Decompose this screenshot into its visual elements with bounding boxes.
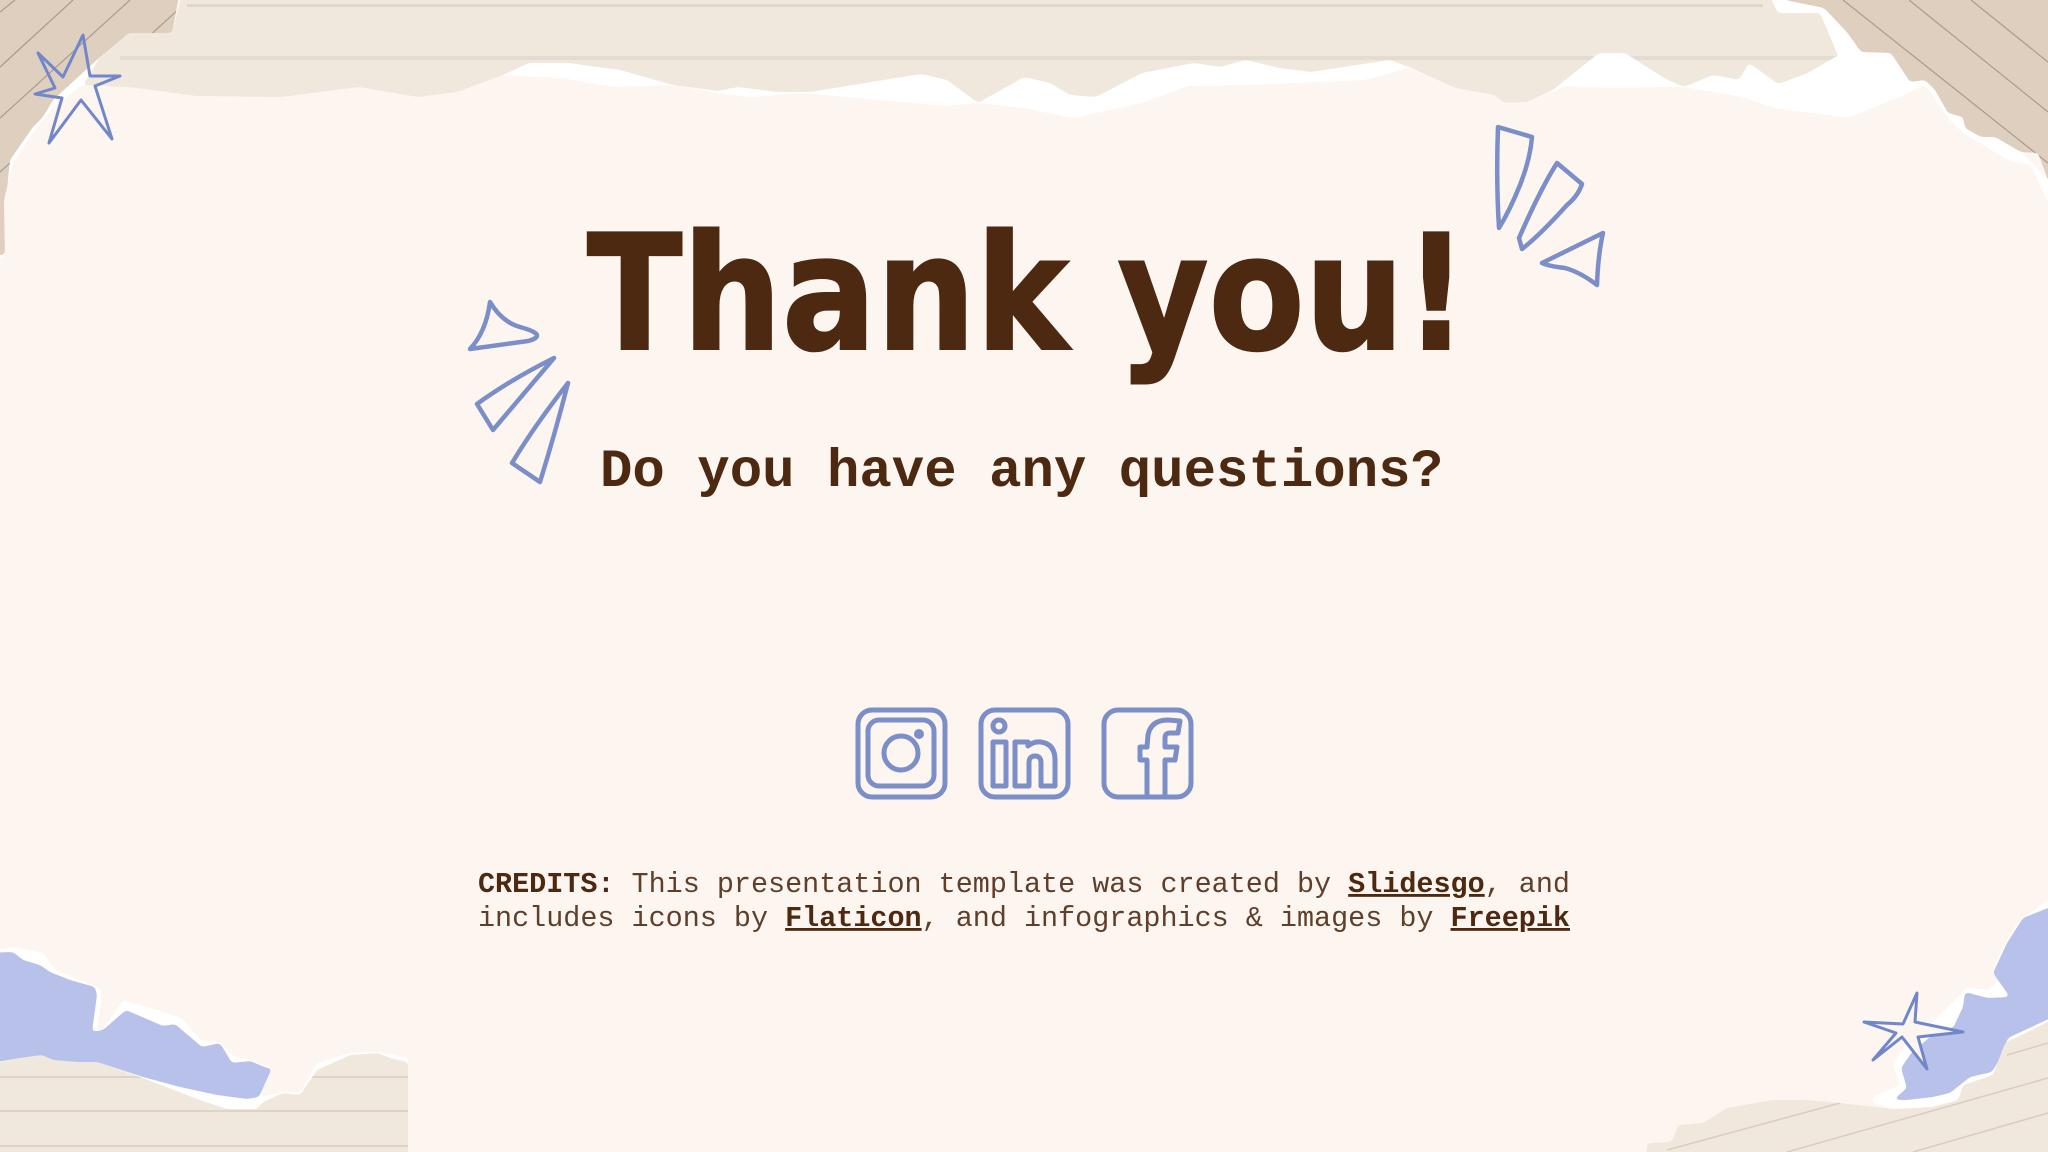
- panel: top right dark tan paper: [1787, 0, 2048, 179]
- panel: bottom left torn papers: [0, 947, 408, 1152]
- panel: bottom right torn papers: [1647, 885, 2048, 1152]
- icon: sparkle right: [1497, 127, 1603, 285]
- subtitle: Do you have any questions?: [600, 442, 1443, 503]
- title: Thank you!: [587, 200, 1468, 387]
- icon: facebook: [1104, 710, 1191, 797]
- icon: star bottom right: [1864, 993, 1963, 1069]
- icon: linkedin: [981, 710, 1068, 797]
- text block: credits: [478, 868, 1570, 935]
- icon: star top left: [35, 35, 120, 143]
- icon: sparkle left: [470, 302, 568, 482]
- credits line 1: CREDITS: This presentation template was created by Slidesgo, and: [478, 868, 1570, 901]
- panel: top light ruled paper: [83, 0, 1850, 160]
- panel: white torn strip at top right: [1762, 0, 1870, 60]
- panel: top left dark tan paper: [0, 0, 182, 255]
- credits line 2: includes icons by Flaticon, and infographics & images by Freepik: [478, 902, 1570, 935]
- icon: instagram: [858, 710, 945, 797]
